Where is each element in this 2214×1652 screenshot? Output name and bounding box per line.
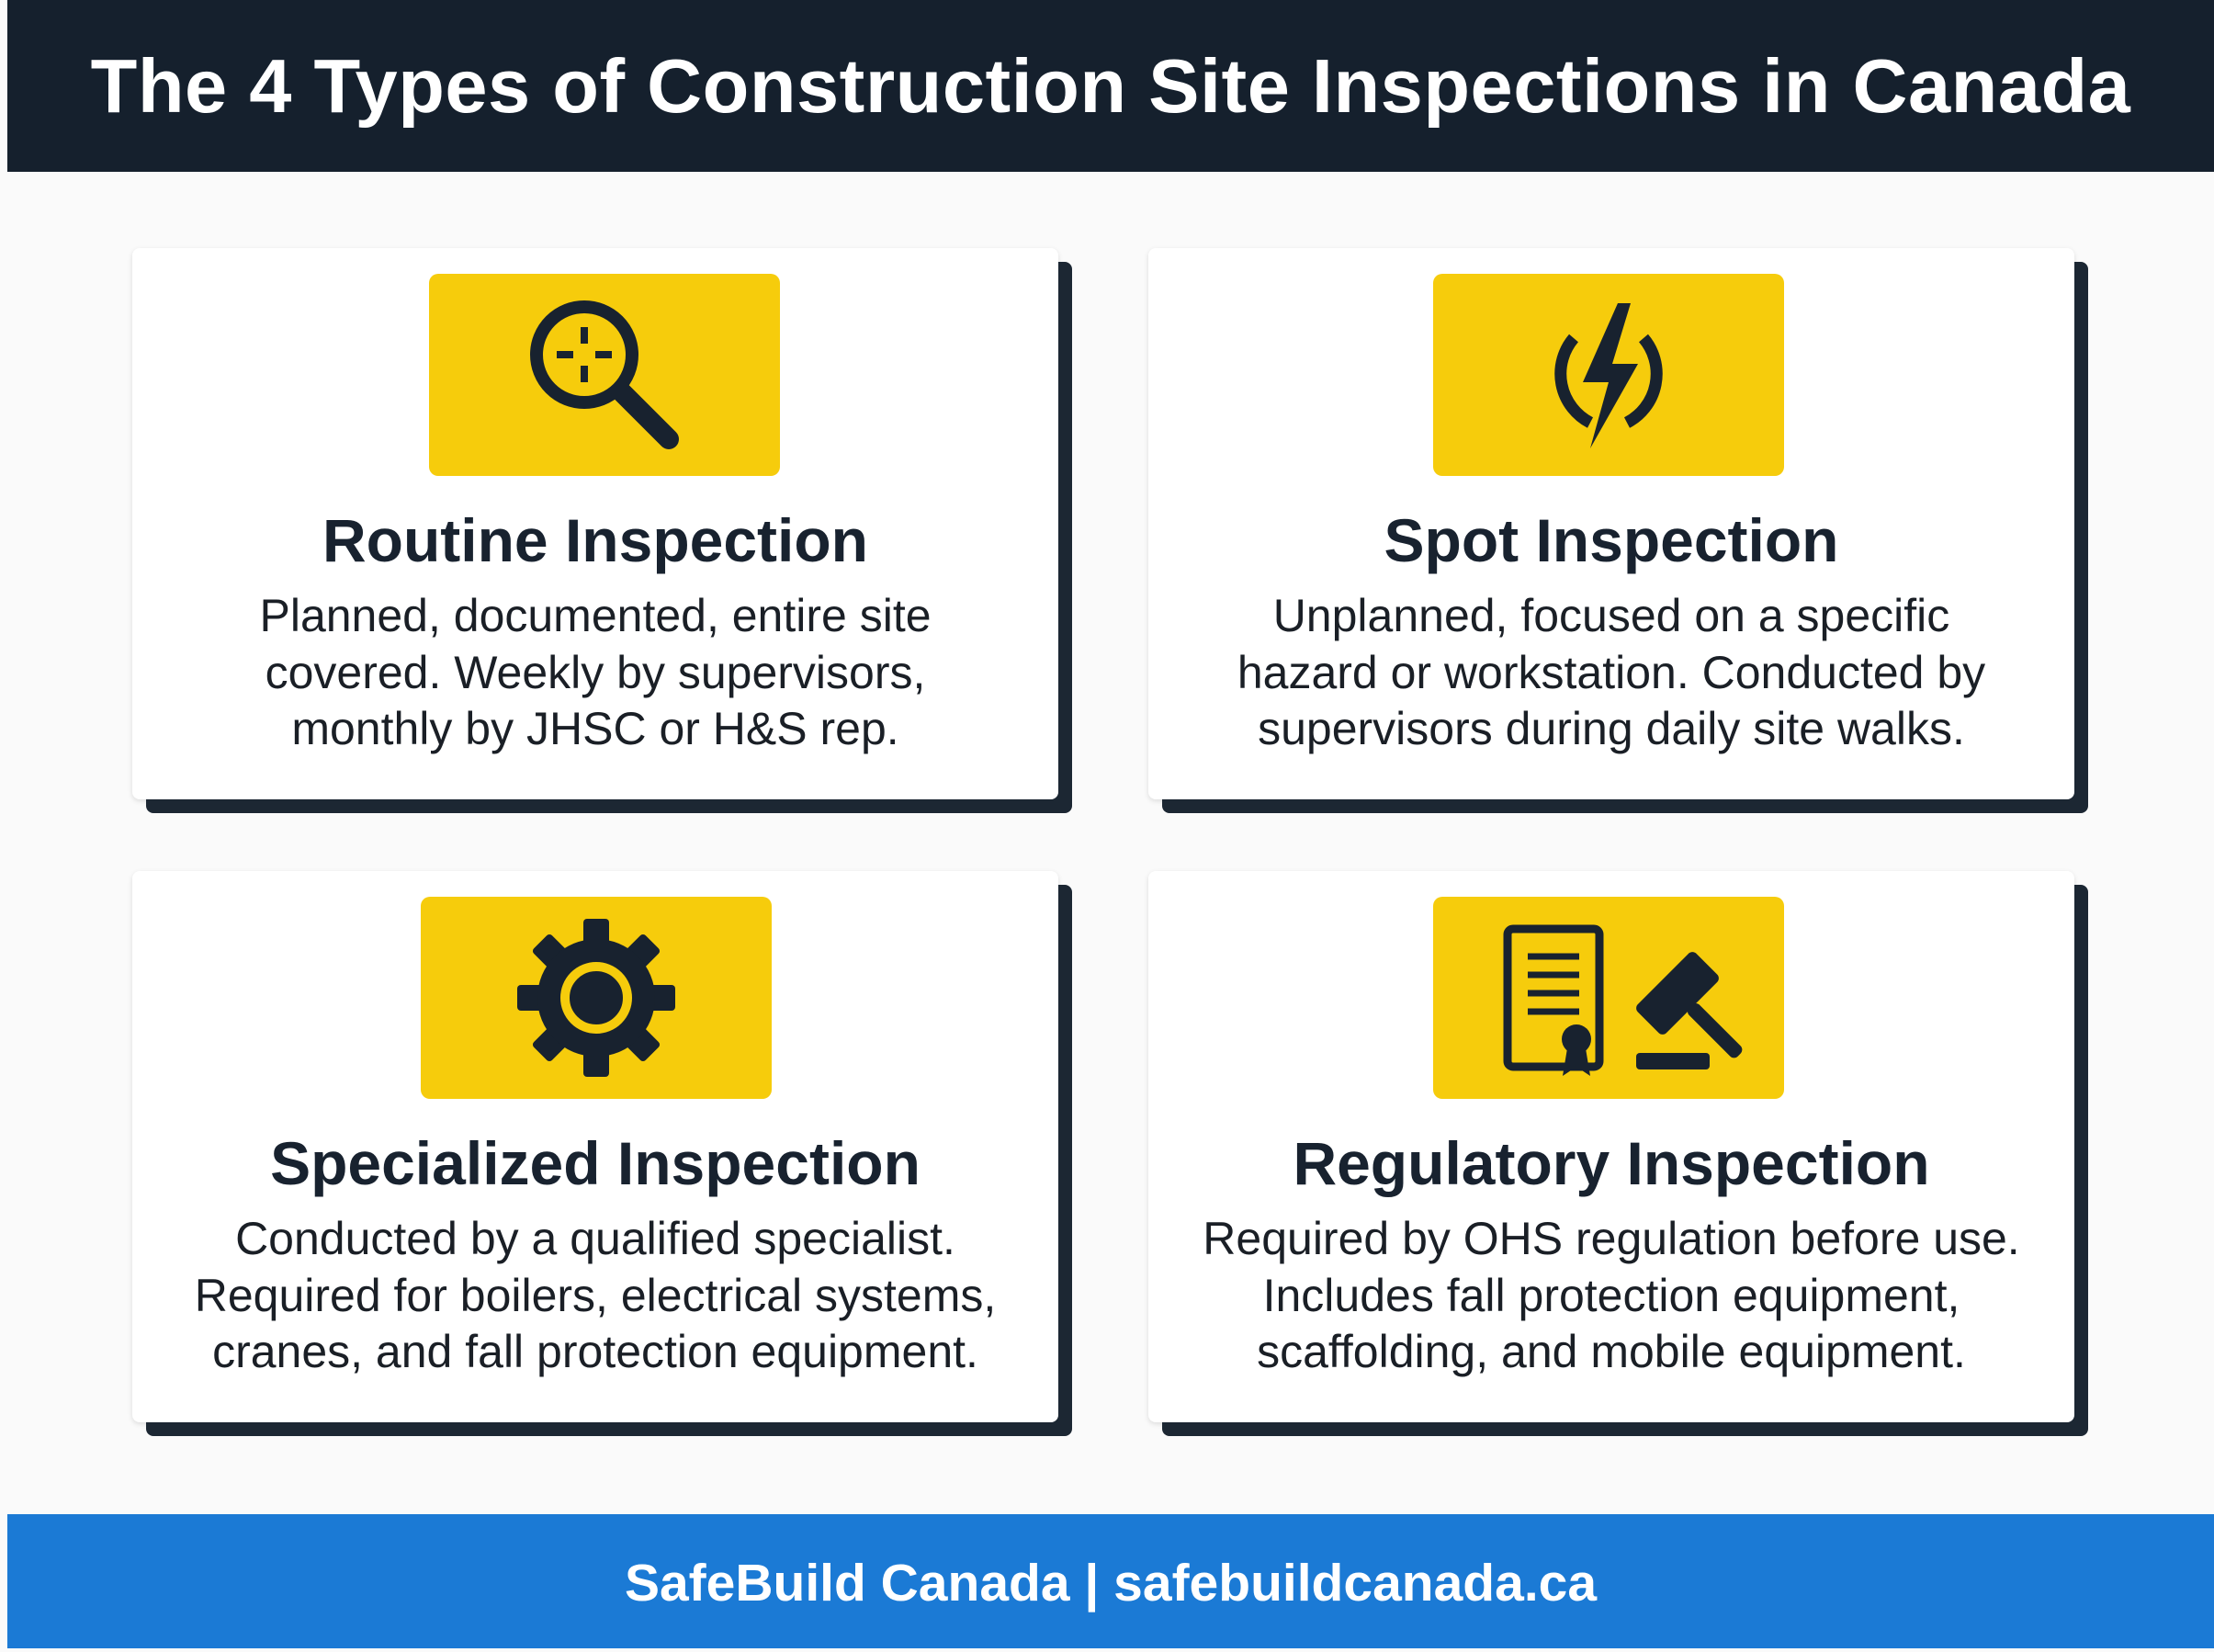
text block: hazard or workstation. Conducted by [1237,647,1985,698]
text block: Planned, documented, entire site [259,590,932,641]
text block [259,590,932,754]
text block: Includes fall protection equipment, [1263,1270,1960,1321]
heading: Routine Inspection [322,506,868,574]
title [7,0,2214,172]
icon: document and gavel [1433,897,1784,1099]
icon: gear [421,897,772,1099]
panel: routine inspection [132,248,1058,799]
icon: magnifying glass [429,274,780,476]
text block: Required by OHS regulation before use. [1203,1213,2020,1264]
text block: Unplanned, focused on a specific [1273,590,1949,641]
footer [7,1514,2214,1648]
heading: Specialized Inspection [270,1129,921,1197]
text block: scaffolding, and mobile equipment. [1257,1326,1966,1377]
text block [1237,590,1985,754]
title: The 4 Types of Construction Site Inspections in Canada [91,43,2130,129]
text block [195,1213,996,1377]
icon: lightning [1433,274,1784,476]
panel: spot inspection [1148,248,2074,799]
text block: cranes, and fall protection equipment. [212,1326,978,1377]
panel: regulatory inspection [1148,871,2074,1422]
text block: covered. Weekly by supervisors, [265,647,925,698]
text block: supervisors during daily site walks. [1258,703,1965,754]
heading: Regulatory Inspection [1293,1129,1930,1197]
text block: Conducted by a qualified specialist. [235,1213,955,1264]
panel: specialized inspection [132,871,1058,1422]
footer: SafeBuild Canada | safebuildcanada.ca [625,1554,1597,1612]
text block: monthly by JHSC or H&S rep. [291,703,899,754]
text block: Required for boilers, electrical systems, [195,1270,996,1321]
text block [1203,1213,2020,1377]
heading: Spot Inspection [1384,506,1839,574]
